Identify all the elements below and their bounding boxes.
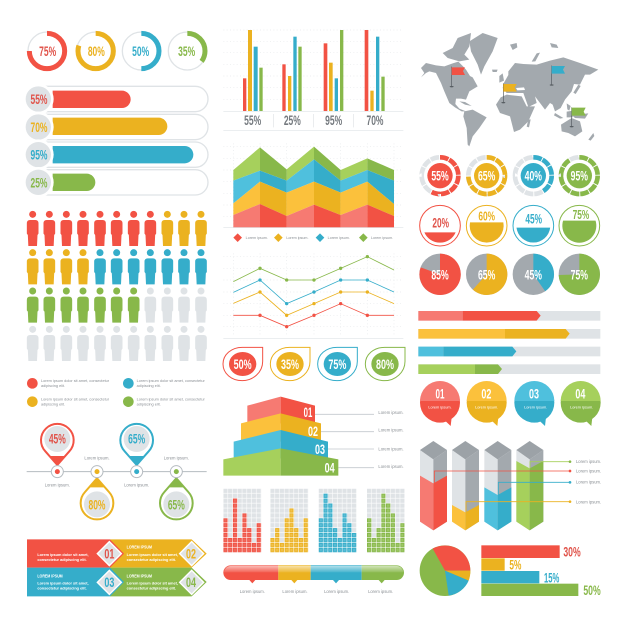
- arrow progress bar green: [418, 364, 600, 374]
- segmented gauge 95%: [561, 157, 598, 194]
- panel: block histograms and glossy segmented bar: [223, 489, 405, 594]
- pie chart: [420, 545, 470, 596]
- pictogram legend: adipiscing elit.: [41, 402, 65, 406]
- bar 30%: [481, 544, 581, 560]
- pyramid labels: Lorem ipsum.: [378, 446, 404, 451]
- column chart group 55%: [243, 30, 263, 128]
- drop badge 50%: [223, 347, 263, 381]
- banner cell 01 red: 01: [104, 545, 114, 561]
- pie 75%: 75%: [571, 266, 588, 282]
- area chart legend: [233, 233, 393, 242]
- segmented gauge 40%: 40%: [525, 168, 542, 184]
- pie 85%: [419, 254, 461, 295]
- bar 15%: 15%: [544, 569, 560, 585]
- pictogram legend: Lorem ipsum dolor sit amet, consectetur: [137, 397, 205, 401]
- segmented gauge 95%: 95%: [571, 168, 588, 184]
- segmented gauge 55%: 55%: [431, 168, 449, 184]
- pyramid labels: [378, 410, 404, 469]
- area chart legend: Lorem ipsum.: [371, 236, 393, 240]
- pictogram legend: Lorem ipsum dolor sit amet, consectetur: [41, 379, 110, 383]
- banner cell 02 yellow: LOREM IPSUM: [127, 545, 152, 550]
- bar 5%: [481, 556, 522, 572]
- area chart legend: Lorem ipsum.: [286, 236, 308, 240]
- banner cell 04 green: LOREM IPSUM: [127, 573, 152, 578]
- timeline labels: Lorem ipsum.: [164, 456, 189, 461]
- pictogram row 4: [27, 326, 207, 361]
- column chart group 95%: [324, 30, 343, 128]
- banner cell 04 green: consectetur adipiscing elit.: [127, 587, 176, 591]
- column chart group 25%: [282, 37, 302, 128]
- progress pill 70%: 70%: [30, 119, 48, 135]
- bar 50%: 50%: [583, 582, 601, 598]
- timeline pin 80%: 80%: [88, 496, 106, 512]
- pictogram legend: Lorem ipsum dolor sit amet, consectetur: [137, 379, 205, 383]
- pie 65%: [466, 254, 507, 295]
- panel: arrow bars, speech bubbles and isometric columns: [418, 311, 601, 530]
- bar 5%: 5%: [509, 556, 522, 572]
- progress pill 25%: [23, 167, 208, 198]
- drop badge 35%: [270, 347, 310, 381]
- speech bubble 02: 02: [481, 386, 491, 402]
- pyramid labels: Lorem ipsum.: [378, 410, 404, 415]
- speech bubble 03: 03: [529, 386, 539, 402]
- timeline labels: [45, 456, 189, 487]
- progress pill 70%: [23, 112, 208, 142]
- drop badge 80%: 80%: [376, 356, 394, 372]
- pie 65%: 65%: [478, 266, 496, 282]
- bar 15%: [481, 569, 560, 585]
- ring gauge 50%: 50%: [132, 43, 150, 59]
- half-filled circle 45%: [513, 205, 554, 246]
- banner cell 02 yellow: consectetur adipiscing elit.: [127, 558, 176, 562]
- speech bubble 04: Lorem ipsum.: [570, 405, 593, 409]
- column callout lines and labels: [434, 459, 601, 512]
- banner cell 04 green: [110, 568, 207, 596]
- column callout lines and labels: Lorem ipsum.: [576, 459, 601, 464]
- banner cell 03 blue: 03: [104, 574, 114, 590]
- line series: blue: [233, 278, 394, 305]
- speech bubble 01: Lorem ipsum.: [428, 405, 452, 409]
- segmented gauge 65%: 65%: [478, 168, 496, 184]
- glossy segmented bar: [223, 565, 404, 583]
- banner cell 03 blue: Lorem ipsum dolor sit amet,: [37, 582, 89, 586]
- timeline pin 65% blue: [120, 424, 153, 478]
- area chart legend: Lorem ipsum.: [328, 236, 350, 240]
- segmented gauge 55%: [422, 157, 458, 194]
- glossy bar labels: Lorem ipsum.: [282, 589, 308, 594]
- banner cell 03 blue: LOREM IPSUM: [37, 573, 63, 578]
- isometric column blue: [484, 441, 511, 530]
- banner cell 02 yellow: Lorem ipsum dolor sit amet,: [127, 553, 178, 557]
- line series: green: [233, 255, 394, 282]
- pictogram row 1: [27, 211, 207, 246]
- pie 75%: [559, 254, 600, 295]
- timeline pin 80%: [81, 466, 113, 519]
- flag: blue: [550, 66, 565, 86]
- half-filled circle 20%: [420, 205, 460, 246]
- area chart legend: Lorem ipsum.: [246, 236, 268, 240]
- drop badge 75%: 75%: [328, 356, 347, 372]
- pyramid labels: Lorem ipsum.: [378, 428, 404, 433]
- speech bubble 01: [420, 381, 460, 426]
- banner cell 04 green: Lorem ipsum dolor sit amet,: [127, 582, 178, 586]
- panel: pin timeline and numbered banner: [27, 424, 207, 596]
- timeline pin 65% blue: 65%: [128, 431, 146, 447]
- ring gauge 35%: 35%: [178, 43, 196, 59]
- half-filled circle 20%: 20%: [432, 214, 449, 230]
- speech bubble 03: [514, 381, 554, 426]
- speech bubble 01: 01: [435, 386, 445, 402]
- banner cell 01 red: [27, 539, 124, 568]
- column chart group 25%: 25%: [284, 112, 301, 128]
- column chart group 70%: [365, 30, 385, 128]
- pyramid step 02: 02: [308, 423, 318, 439]
- glossy bar labels: Lorem ipsum.: [368, 589, 393, 594]
- timeline labels: Lorem ipsum.: [45, 482, 70, 487]
- progress pill 95%: 95%: [30, 147, 48, 163]
- banner cell 01 red: Lorem ipsum dolor sit amet,: [37, 553, 89, 557]
- line series: yellow: [233, 290, 394, 317]
- arrow progress bar yellow: [418, 329, 600, 339]
- pyramid step 03: 03: [315, 441, 325, 457]
- banner cell 04 green: 04: [186, 574, 196, 590]
- pyramid leader lines: [315, 414, 374, 468]
- speech bubble 03: Lorem ipsum.: [524, 405, 547, 409]
- timeline pin 65% green: [160, 466, 193, 519]
- world map with flags: [421, 33, 598, 146]
- panel: ring gauges and progress pills: [23, 32, 208, 198]
- pyramid labels: Lorem ipsum.: [378, 464, 404, 469]
- drop badge 35%: 35%: [281, 356, 299, 372]
- block histogram yellow: [270, 489, 308, 553]
- banner cell 03 blue: [27, 568, 124, 596]
- pictogram row 2: [27, 249, 207, 284]
- flag: red: [450, 67, 465, 87]
- pyramid step 04: 04: [325, 459, 335, 475]
- pictogram legend: adipiscing elit.: [41, 384, 65, 388]
- flag: yellow: [501, 83, 517, 103]
- drop badge 50%: 50%: [234, 356, 252, 372]
- column callout lines and labels: Lorem ipsum.: [576, 468, 601, 473]
- timeline labels: Lorem ipsum.: [124, 482, 149, 487]
- progress pill 25%: 25%: [30, 174, 48, 190]
- segmented gauge 40%: [515, 157, 552, 194]
- bar 30%: 30%: [563, 544, 581, 560]
- speech bubble 04: 04: [575, 386, 585, 402]
- half-filled circle 60%: 60%: [478, 209, 495, 223]
- ring gauge 35%: [168, 32, 206, 70]
- segmented gauge 65%: [468, 157, 505, 194]
- banner cell 03 blue: consectetur adipiscing elit.: [37, 587, 87, 591]
- panel: column chart and stacked area chart: [223, 30, 403, 242]
- isometric column yellow: [452, 441, 479, 530]
- pictogram legend: Lorem ipsum dolor sit amet, consectetur: [41, 397, 110, 401]
- pyramid step 02: [241, 413, 321, 442]
- timeline labels: Lorem ipsum.: [84, 456, 110, 461]
- flag: green: [570, 107, 586, 127]
- timeline pin 45%: [41, 424, 74, 478]
- isometric column green: [516, 441, 543, 530]
- stacked area chart: [233, 147, 394, 227]
- panel: world map, segmented gauges, half-filled and pie circles: [419, 33, 600, 295]
- pie 45%: [513, 254, 554, 295]
- speech bubble 04: [561, 381, 601, 426]
- pictogram legend: [27, 378, 205, 407]
- speech bubble 02: [467, 381, 507, 426]
- half-filled circle 45%: 45%: [525, 210, 542, 226]
- block histogram blue: [319, 489, 357, 553]
- progress pill 55%: [23, 84, 208, 114]
- pyramid step 04: [223, 448, 338, 476]
- drop badge 75%: [318, 347, 357, 381]
- ring gauge 80%: 80%: [88, 43, 105, 59]
- progress pill 95%: [23, 139, 208, 170]
- column callout lines and labels: Lorem ipsum.: [576, 499, 601, 504]
- column chart group 70%: 70%: [366, 112, 384, 128]
- ring gauge 50%: [122, 32, 160, 70]
- ring gauge 80%: [77, 32, 115, 70]
- panel: line chart, drop badges and stepped pyramid: [223, 253, 405, 476]
- banner cell 02 yellow: [110, 539, 207, 568]
- arrow progress bar blue: [418, 347, 600, 356]
- banner cell 01 red: consectetur adipiscing elit.: [37, 558, 87, 562]
- panel: people pictogram chart and legend: [27, 211, 207, 407]
- glossy bar labels: [240, 589, 393, 594]
- speech bubble 02: Lorem ipsum.: [475, 405, 498, 409]
- pictogram row 3: [27, 287, 207, 323]
- pyramid step 01: 01: [304, 404, 312, 420]
- glossy bar labels: Lorem ipsum.: [240, 589, 265, 594]
- pie 45%: 45%: [525, 266, 542, 282]
- isometric column red: [420, 441, 447, 530]
- bar 50%: [481, 582, 601, 598]
- half-filled circle 60%: [466, 205, 507, 246]
- progress pill 55%: 55%: [30, 91, 48, 107]
- drop badge 80%: [365, 347, 405, 381]
- glossy bar labels: Lorem ipsum.: [324, 589, 349, 594]
- column chart group 95%: 95%: [325, 112, 343, 128]
- pyramid step 03: [234, 430, 328, 458]
- column callout lines and labels: Lorem ipsum.: [576, 480, 601, 485]
- column chart group 55%: 55%: [244, 112, 262, 128]
- ring gauge 75%: 75%: [39, 43, 57, 59]
- block histogram green: [367, 489, 405, 553]
- line series: red: [233, 302, 394, 328]
- banner cell 02 yellow: 02: [186, 545, 196, 561]
- pictogram legend: adipiscing elit.: [137, 402, 161, 406]
- arrow progress bar red: [418, 311, 600, 321]
- panel: pie chart with horizontal bars: [420, 544, 601, 598]
- timeline pin 45%: 45%: [49, 431, 66, 447]
- half-filled circle 75%: [559, 205, 600, 246]
- timeline pin 65% green: 65%: [168, 496, 185, 512]
- pictogram legend: adipiscing elit.: [137, 384, 161, 388]
- block histogram red: [223, 489, 261, 553]
- pyramid step 01: [247, 397, 315, 423]
- pie 85%: 85%: [431, 266, 449, 282]
- ring gauge 75%: [28, 32, 66, 70]
- half-filled circle 75%: 75%: [573, 208, 589, 222]
